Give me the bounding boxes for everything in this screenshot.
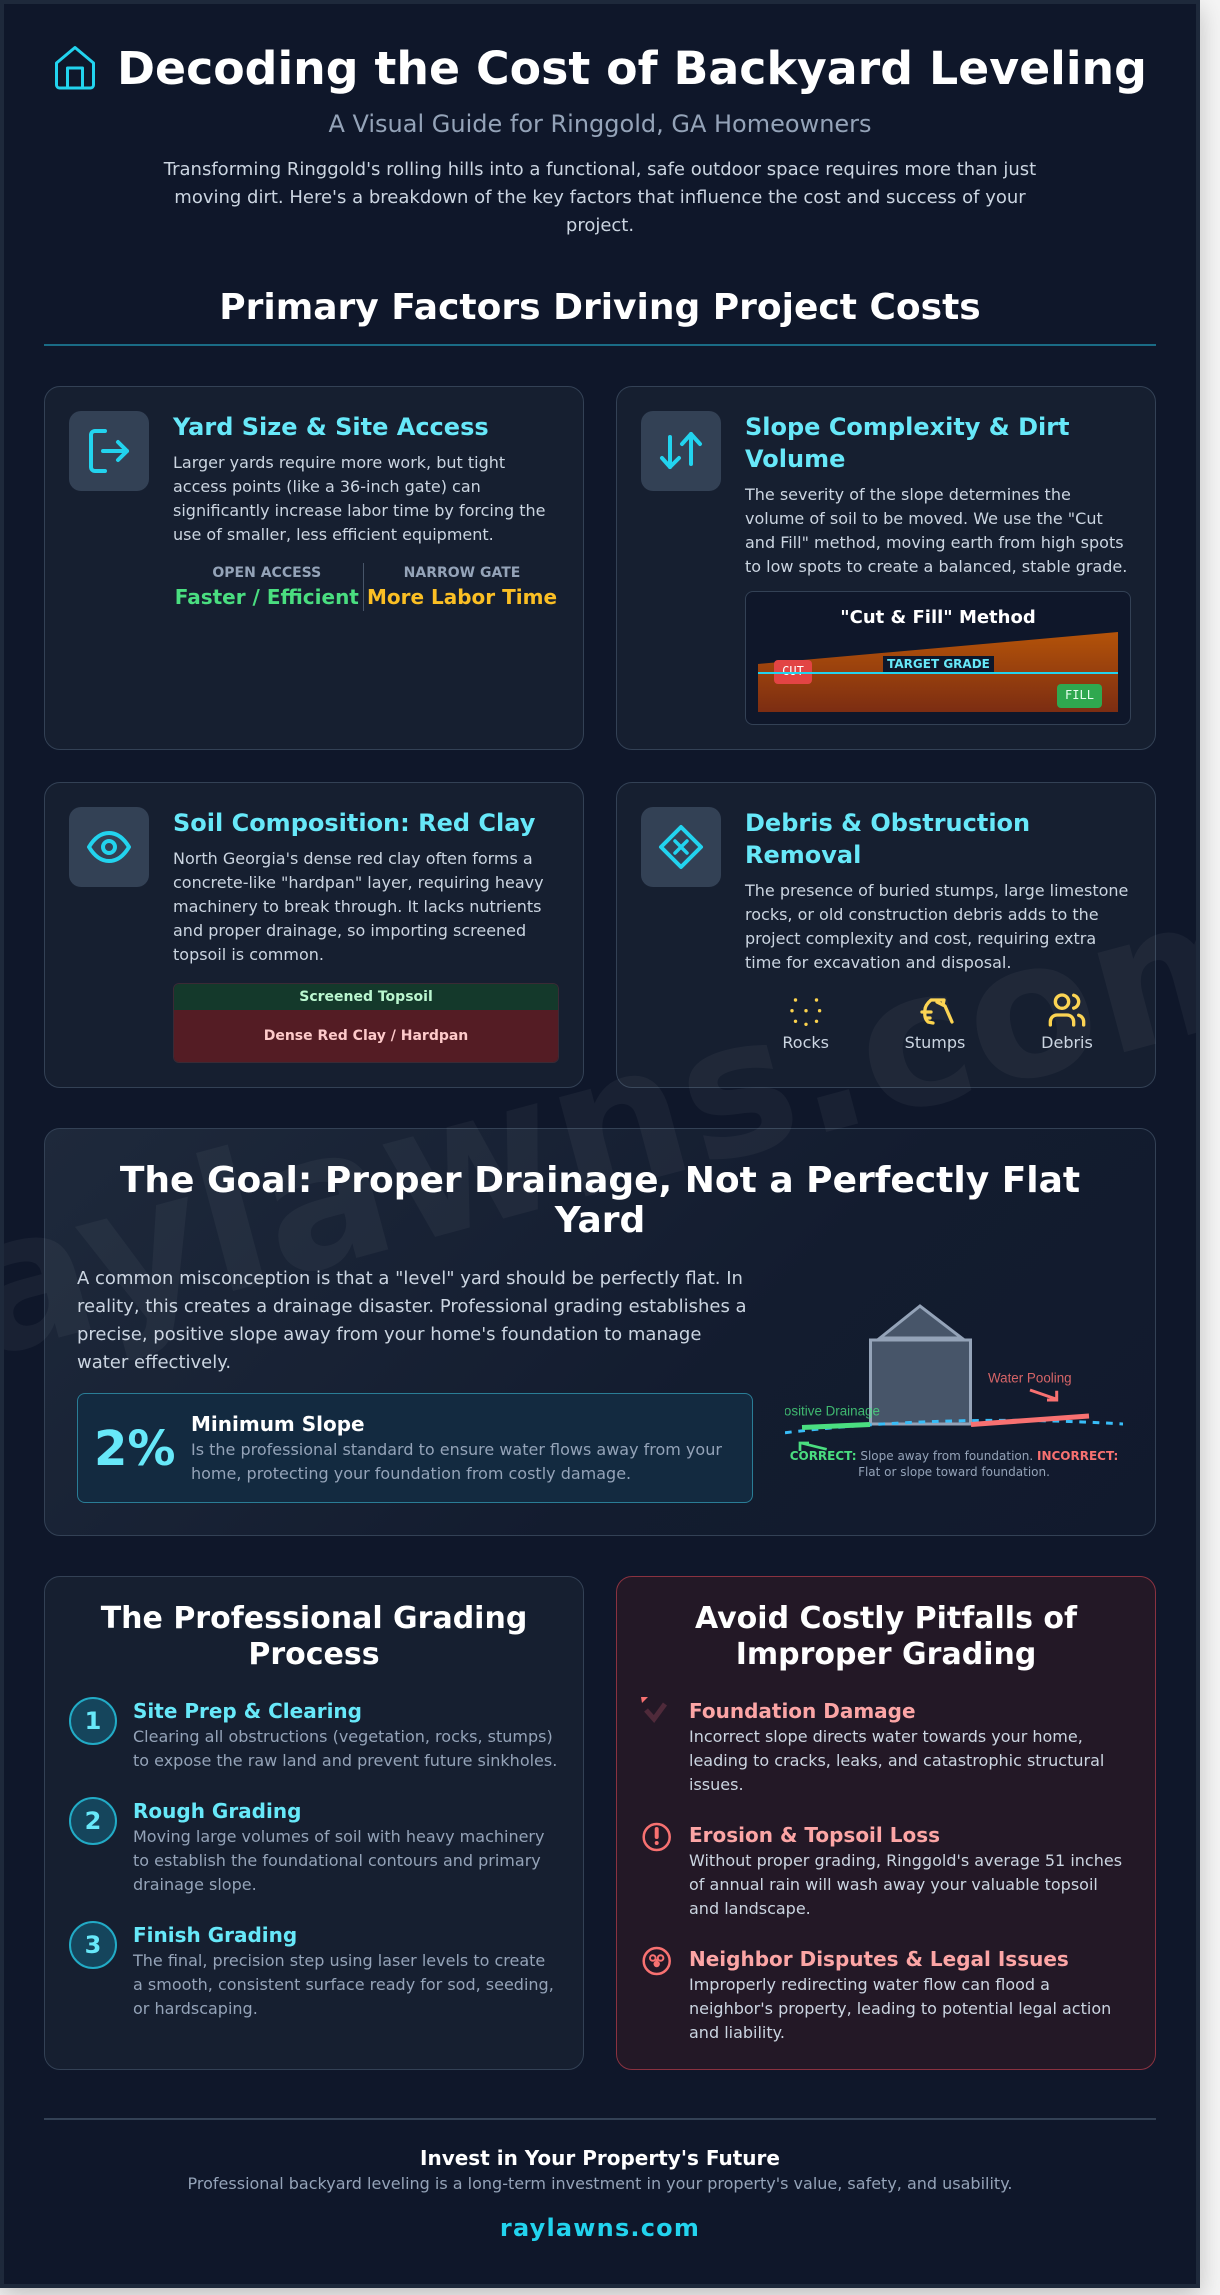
stat: 2%: 2% [94, 1421, 176, 1477]
heading: grading process: Process [248, 1637, 380, 1672]
heading: grading process: The Professional Grading [101, 1601, 527, 1636]
text: soil composition: topsoil is common. [173, 945, 324, 964]
text: misconception [77, 1268, 747, 1373]
step 1: to expose the raw land and prevent future sinkholes. [133, 1751, 557, 1770]
pitfall: erosion: and landscape. [689, 1899, 811, 1918]
caption: correct vs incorrect: Flat or slope toward foundation. [858, 1465, 1050, 1479]
diagram: cut and fill [745, 591, 1131, 725]
text: soil composition: concrete-like "hardpan" layer, requiring heavy [173, 873, 544, 892]
step 1: Clearing all obstructions (vegetation, rocks, stumps) [133, 1727, 553, 1746]
diagram: house slope: Water Pooling [988, 1371, 1072, 1386]
panel: yard size and site access [44, 386, 584, 750]
text: yard size: significantly increase labor time by forcing the [173, 501, 545, 520]
step 3 [69, 1921, 554, 2018]
pitfall: erosion: Without proper grading, Ringgold's average 51 inches [689, 1851, 1122, 1870]
text: debris: Debris & Obstruction [745, 809, 1030, 837]
text: slope complexity: Volume [745, 445, 845, 473]
heading: avoid pitfalls [695, 1601, 1078, 1672]
step 2: drainage slope. [133, 1875, 257, 1894]
step 1: Site Prep & Clearing [133, 1699, 362, 1723]
item: debris: Debris [1041, 1033, 1093, 1052]
text: slope complexity: to low spots to create a balanced, stable grade. [745, 557, 1127, 576]
text: yard size: use of smaller, less efficient equipment. [173, 525, 494, 544]
item: stumps: Stumps [905, 1033, 965, 1052]
text: minimum slope: Minimum Slope [191, 1412, 365, 1436]
text: minimum slope: Is the professional standard to ensure water flows away from your [191, 1440, 722, 1459]
heading: the goal: The Goal: Proper Drainage, Not a Perfectly Flat [120, 1160, 1080, 1201]
comparison: open access vs narrow gate: OPEN ACCESS [212, 565, 321, 581]
step 1: 1 [85, 1707, 101, 1735]
step 3: Finish Grading [133, 1923, 297, 1947]
text: soil composition: machinery to break through. It lacks nutrients [173, 897, 541, 916]
text: misconception: precise, positive slope away from your home's foundation to manage [77, 1324, 701, 1345]
caption: correct vs incorrect: CORRECT: Slope away from foundation. INCORRECT: [790, 1449, 1118, 1463]
pitfall: neighbor disputes: Neighbor Disputes & Legal Issues [689, 1947, 1069, 1971]
footer heading: Invest in Your Property's Future [420, 2146, 780, 2170]
panel: slope complexity and dirt volume [616, 386, 1156, 750]
pitfall: neighbor disputes [642, 1946, 1111, 2042]
icon: up and down arrows [641, 411, 721, 491]
text: soil composition: Soil Composition: Red Clay [173, 809, 535, 837]
step 3: 3 [85, 1931, 101, 1959]
title: Decoding the Cost of Backyard Leveling [117, 41, 1147, 95]
pitfall: foundation damage: issues. [689, 1775, 744, 1794]
comparison: open access vs narrow gate [175, 563, 557, 611]
item: rocks: Rocks [782, 1033, 829, 1052]
pitfall: foundation damage: Incorrect slope directs water towards your home, [689, 1727, 1083, 1746]
section heading: primary factors: Primary Factors Driving Project Costs [219, 287, 981, 328]
text: slope complexity: volume of soil to be moved. We use the "Cut [745, 509, 1103, 528]
text: misconception: reality, this creates a drainage disaster. Professional grading establishes a [77, 1296, 747, 1317]
icon: exit arrow [69, 411, 149, 491]
icon: diamond with x [641, 807, 721, 887]
diagram: cut and fill: CUT [782, 664, 804, 678]
pitfall: neighbor disputes: Improperly redirecting water flow can flood a [689, 1975, 1050, 1994]
icon: house [55, 46, 95, 90]
intro text: moving dirt. Here's a breakdown of the key factors that influence the cost and success of your [174, 187, 1026, 208]
text: debris [744, 809, 1128, 1052]
comparison: open access vs narrow gate: More Labor Time [367, 585, 557, 609]
footer text: Professional backyard leveling is a long-term investment in your property's value, safety, and usability. [188, 2174, 1012, 2193]
step 3: The final, precision step using laser levels to create [133, 1951, 545, 1970]
pitfall: neighbor disputes: and liability. [689, 2023, 785, 2042]
pitfall: neighbor disputes: neighbor's property, leading to potential legal action [689, 1999, 1111, 2018]
footer brand: raylawns.com [500, 2214, 700, 2242]
diagram: cut and fill: "Cut & Fill" Method [840, 607, 1036, 628]
icon: eye [69, 807, 149, 887]
icon row: rocks, stumps, debris [782, 993, 1093, 1052]
heading: avoid pitfalls: Avoid Costly Pitfalls of [695, 1601, 1077, 1636]
pitfall: foundation damage [641, 1697, 1104, 1794]
pitfall: erosion: Erosion & Topsoil Loss [689, 1823, 940, 1847]
caption: correct vs incorrect [790, 1449, 1118, 1479]
text: debris: Removal [745, 841, 861, 869]
step 2: to establish the foundational contours and primary [133, 1851, 541, 1870]
comparison: open access vs narrow gate: NARROW GATE [404, 565, 520, 581]
text: minimum slope: home, protecting your foundation from costly damage. [191, 1464, 631, 1483]
diagram: soil layers: Dense Red Clay / Hardpan [264, 1028, 468, 1044]
text: soil composition [173, 809, 559, 1063]
text: soil composition: North Georgia's dense red clay often forms a [173, 849, 533, 868]
item: stumps [905, 998, 965, 1052]
step 3: or hardscaping. [133, 1999, 258, 2018]
intro text [164, 159, 1036, 236]
step 2 [69, 1797, 544, 1894]
heading: avoid pitfalls: Improper Grading [736, 1637, 1036, 1672]
pitfall: erosion: of annual rain will wash away your valuable topsoil [689, 1875, 1098, 1894]
panel: debris and obstruction removal [616, 782, 1156, 1088]
pitfall: foundation damage: Foundation Damage [689, 1699, 916, 1723]
text: debris: project complexity and cost, requiring extra [745, 929, 1096, 948]
text: debris: time for excavation and disposal. [745, 953, 1011, 972]
step 2: Moving large volumes of soil with heavy machinery [133, 1827, 544, 1846]
diagram: soil layers [173, 983, 559, 1063]
callout: 2% minimum slope [77, 1393, 753, 1503]
item: debris [1041, 993, 1093, 1052]
text: slope complexity: Slope Complexity & Dirt [745, 413, 1070, 441]
step 3: a smooth, consistent surface ready for sod, seeding, [133, 1975, 554, 1994]
step 2: 2 [85, 1807, 101, 1835]
text: slope complexity: The severity of the slope determines the [745, 485, 1071, 504]
item: rocks [782, 998, 829, 1052]
heading: grading process [100, 1601, 527, 1672]
text: misconception: A common misconception is that a "level" yard should be perfectly flat. In [77, 1268, 743, 1289]
diagram: cut and fill: FILL [1065, 688, 1094, 702]
step 2: Rough Grading [133, 1799, 301, 1823]
text: minimum slope [191, 1412, 722, 1483]
step 1 [69, 1697, 557, 1770]
panel: soil composition [44, 782, 584, 1088]
text: slope complexity: and Fill" method, moving earth from high spots [745, 533, 1124, 552]
heading: the goal [120, 1160, 1080, 1241]
intro text: Transforming Ringgold's rolling hills into a functional, safe outdoor space requires more than just [164, 159, 1036, 180]
footer [44, 2118, 1156, 2244]
pitfall: foundation damage: leading to cracks, leaks, and catastrophic structural [689, 1751, 1104, 1770]
text: debris: The presence of buried stumps, large limestone [745, 881, 1128, 900]
text: yard size: access points (like a 36-inch gate) can [173, 477, 481, 496]
text: misconception: water effectively. [77, 1352, 231, 1373]
panel: costly pitfalls [616, 1576, 1156, 2070]
section heading: primary factors [44, 288, 1156, 346]
text: yard size: Yard Size & Site Access [173, 413, 489, 441]
diagram: soil layers: Screened Topsoil [299, 989, 433, 1005]
panel: proper drainage goal [44, 1128, 1156, 1536]
heading: the goal: Yard [555, 1200, 645, 1241]
comparison: open access vs narrow gate: Faster / Efficient [175, 585, 359, 609]
text: slope complexity [744, 413, 1131, 725]
diagram: house slope [785, 1304, 1123, 1451]
text: soil composition: and proper drainage, so importing screened [173, 921, 526, 940]
text: yard size [172, 413, 557, 611]
pitfall: erosion [642, 1822, 1122, 1918]
diagram: cut and fill: TARGET GRADE [887, 657, 990, 671]
panel: professional grading process [44, 1576, 584, 2070]
text: debris: rocks, or old construction debris adds to the [745, 905, 1099, 924]
text: yard size: Larger yards require more work, but tight [173, 453, 505, 472]
subtitle: A Visual Guide for Ringgold, GA Homeowners [328, 110, 872, 138]
intro text: project. [566, 215, 634, 236]
